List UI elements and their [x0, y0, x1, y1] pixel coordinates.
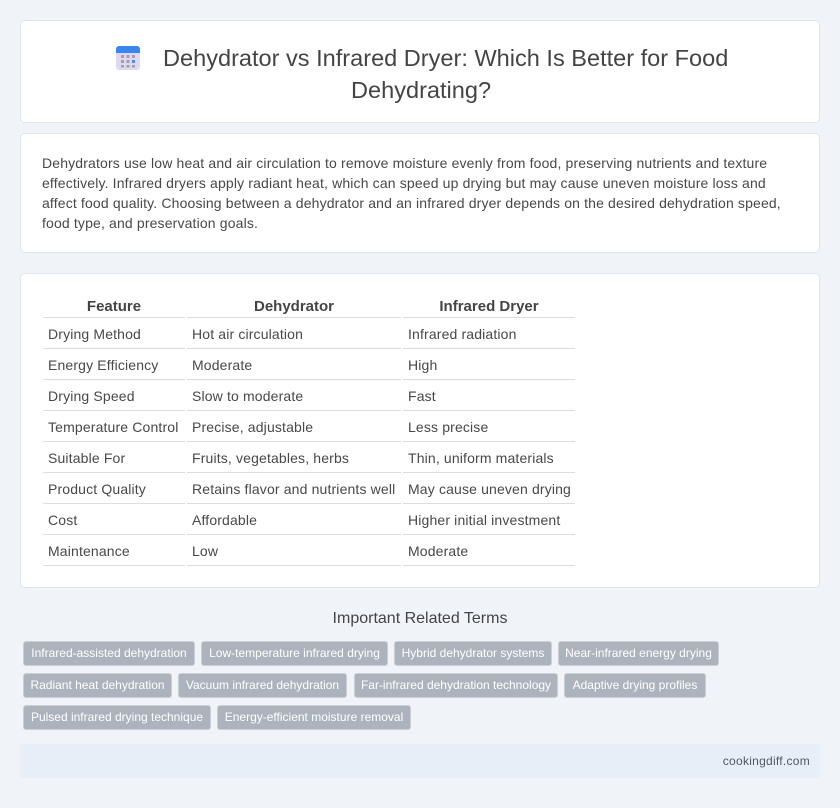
comparison table: Moderate [408, 543, 468, 559]
title: Dehydrating? [351, 77, 491, 103]
comparison table [43, 298, 575, 566]
comparison table: Suitable For [48, 450, 125, 466]
tag list [23, 641, 719, 730]
comparison table: High [408, 357, 437, 373]
comparison table: May cause uneven drying [408, 481, 571, 497]
comparison table: Low [192, 543, 218, 559]
comparison table: Less precise [408, 419, 488, 435]
tag list: Hybrid dehydrator systems [402, 646, 544, 660]
tag list: Radiant heat dehydration [30, 678, 165, 692]
introduction text: food type, and preservation goals. [42, 215, 258, 231]
comparison table: Retains flavor and nutrients well [192, 481, 395, 497]
comparison table: Product Quality [48, 481, 146, 497]
comparison table: Affordable [192, 512, 257, 528]
title [163, 45, 728, 103]
comparison table: Drying Speed [48, 388, 135, 404]
comparison table: Cost [48, 512, 77, 528]
introduction text: effectively. Infrared dryers apply radiant heat, which can speed up drying but may cause uneven moisture loss and [42, 175, 766, 191]
introduction text: Dehydrators use low heat and air circulation to remove moisture evenly from food, preserving nutrients and texture [42, 155, 767, 171]
introduction text: affect food quality. Choosing between a dehydrator and an infrared dryer depends on the desired dehydration speed, [42, 195, 781, 211]
tag list: Far-infrared dehydration technology [361, 678, 551, 692]
tag list: Vacuum infrared dehydration [186, 678, 339, 692]
comparison table: Energy Efficiency [48, 357, 158, 373]
comparison table: Dehydrator [254, 298, 334, 315]
title: Dehydrator vs Infrared Dryer: Which Is Better for Food [163, 45, 728, 71]
comparison table: Maintenance [48, 543, 130, 559]
comparison table: Drying Method [48, 326, 141, 342]
footer site name: cookingdiff.com [723, 754, 810, 768]
comparison table: Infrared radiation [408, 326, 517, 342]
tag list: Low-temperature infrared drying [209, 646, 380, 660]
comparison table: Hot air circulation [192, 326, 303, 342]
comparison table: Temperature Control [48, 419, 178, 435]
comparison table: Higher initial investment [408, 512, 560, 528]
comparison table: Slow to moderate [192, 388, 303, 404]
icon: calendar grid [116, 46, 140, 70]
tag list: Adaptive drying profiles [573, 678, 697, 692]
comparison table: Infrared Dryer [439, 298, 539, 315]
comparison table: Fast [408, 388, 436, 404]
tag list: Pulsed infrared drying technique [31, 710, 203, 724]
comparison table: Thin, uniform materials [408, 450, 554, 466]
comparison table: Fruits, vegetables, herbs [192, 450, 349, 466]
footer bar [20, 744, 820, 778]
panel: title card [20, 20, 820, 123]
tag list: Energy-efficient moisture removal [225, 710, 403, 724]
panel: comparison table card [20, 273, 820, 588]
comparison table: Precise, adjustable [192, 419, 313, 435]
heading: important related terms: Important Related Terms [333, 610, 507, 627]
comparison table: Feature [87, 298, 141, 315]
panel: introduction card [20, 133, 820, 253]
comparison table: Moderate [192, 357, 252, 373]
tag list: Infrared-assisted dehydration [31, 646, 187, 660]
introduction text [42, 155, 781, 231]
tag list: Near-infrared energy drying [565, 646, 712, 660]
